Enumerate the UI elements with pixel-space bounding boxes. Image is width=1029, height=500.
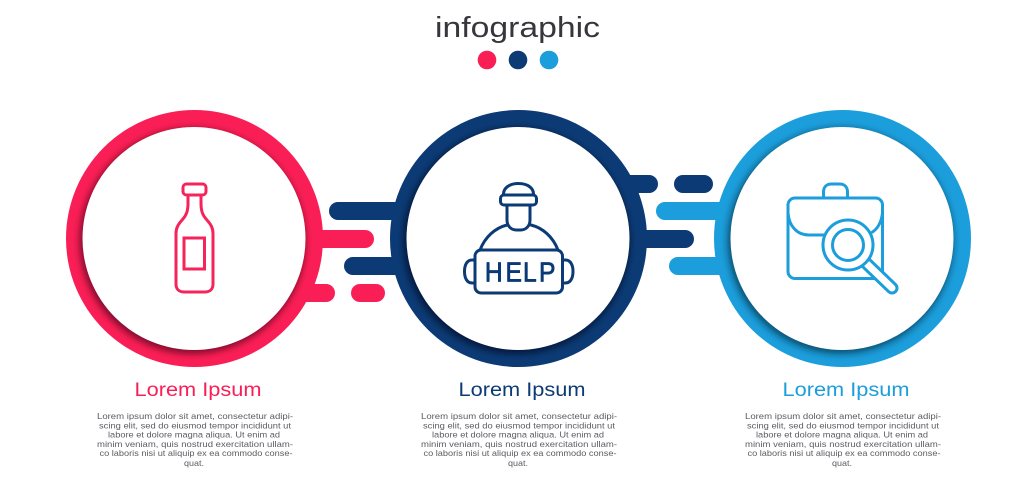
heading: pink: Lorem Ipsum [134, 380, 262, 401]
body text: blue column: quat. [832, 458, 852, 468]
body text: pink column: scing elit, sed do eiusmod tempor incididunt ut [99, 420, 292, 430]
body text: blue column: labore et dolore magna aliqua. Ut enim ad [756, 430, 928, 440]
body text: navy column: minim veniam, quis nostrud exercitation ullam- [421, 439, 617, 449]
body text: pink column: Lorem ipsum dolor sit amet, consectetur adipi- [97, 411, 293, 421]
body text: navy column: Lorem ipsum dolor sit amet, consectetur adipi- [421, 411, 617, 421]
body text: blue column: scing elit, sed do eiusmod tempor incididunt ut [747, 420, 940, 430]
body text: navy column: quat. [508, 458, 528, 468]
connector bars: blue [656, 202, 746, 275]
colour dots [478, 51, 558, 69]
pink ring [66, 110, 323, 367]
heading: navy: Lorem Ipsum [458, 380, 586, 401]
body text: pink column: quat. [184, 458, 204, 468]
icon: person holding help sign [464, 184, 573, 293]
body text: pink column [97, 411, 293, 468]
body text: navy column: scing elit, sed do eiusmod tempor incididunt ut [423, 420, 616, 430]
body text: pink column: co laboris nisi ut aliquip ex ea commodo conse- [100, 448, 293, 458]
blue ring [714, 110, 971, 367]
body text: blue column: minim veniam, quis nostrud exercitation ullam- [745, 439, 941, 449]
body text: pink column: labore et dolore magna aliqua. Ut enim ad [108, 430, 280, 440]
body text: blue column: Lorem ipsum dolor sit amet, consectetur adipi- [745, 411, 941, 421]
heading: blue: Lorem Ipsum [782, 380, 910, 401]
body text: navy column [421, 411, 617, 468]
body text: navy column: co laboris nisi ut aliquip ex ea commodo conse- [424, 448, 617, 458]
body text: blue column: co laboris nisi ut aliquip ex ea commodo conse- [748, 448, 941, 458]
body text: blue column [745, 411, 941, 468]
body text: navy column: labore et dolore magna aliqua. Ut enim ad [432, 430, 604, 440]
navy ring [390, 110, 647, 367]
icon: bottle [176, 184, 213, 292]
help lettering: HELP [485, 256, 555, 288]
connector bars: navy [329, 175, 713, 275]
body text: pink column: minim veniam, quis nostrud exercitation ullam- [97, 439, 293, 449]
icon: briefcase with magnifier [788, 184, 892, 288]
title: infographic [435, 12, 600, 44]
connector bars: pink [290, 230, 385, 302]
